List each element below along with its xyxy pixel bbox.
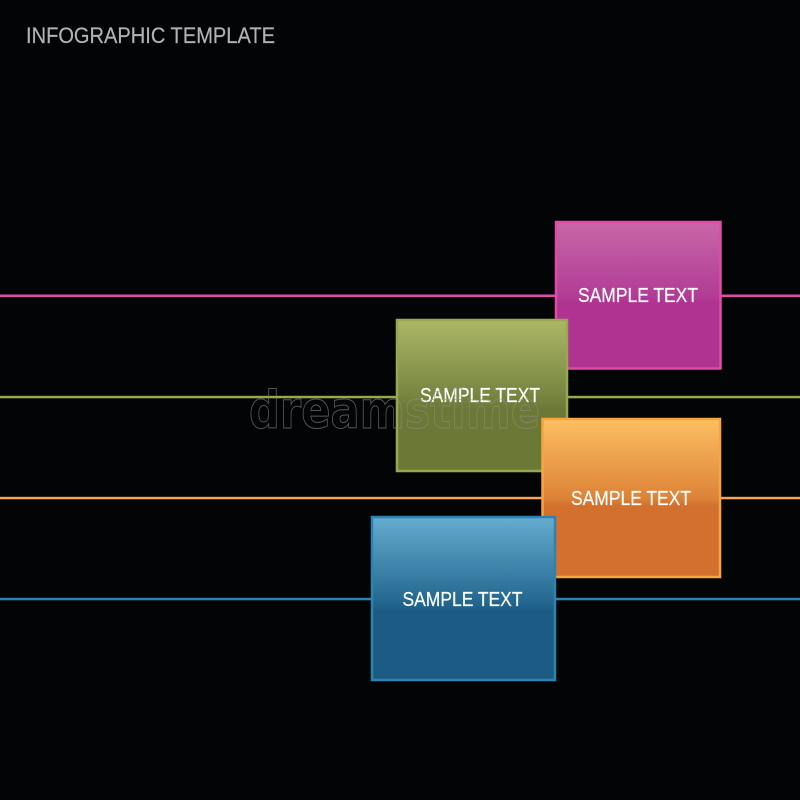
panel: green — [397, 320, 567, 471]
label: blue panel: SAMPLE TEXT — [402, 589, 522, 611]
line: blue — [0, 598, 800, 600]
watermark: dreamstime — [249, 381, 540, 441]
panel: magenta — [556, 222, 720, 368]
panel: blue — [372, 517, 555, 680]
title: INFOGRAPHIC TEMPLATE — [26, 23, 275, 48]
panel: orange — [542, 419, 720, 577]
label: green panel: SAMPLE TEXT — [420, 385, 540, 407]
label: magenta panel: SAMPLE TEXT — [578, 285, 698, 307]
label: orange panel: SAMPLE TEXT — [571, 488, 691, 510]
line: green — [0, 396, 800, 398]
line: pink — [0, 294, 800, 297]
line: orange — [0, 497, 800, 499]
